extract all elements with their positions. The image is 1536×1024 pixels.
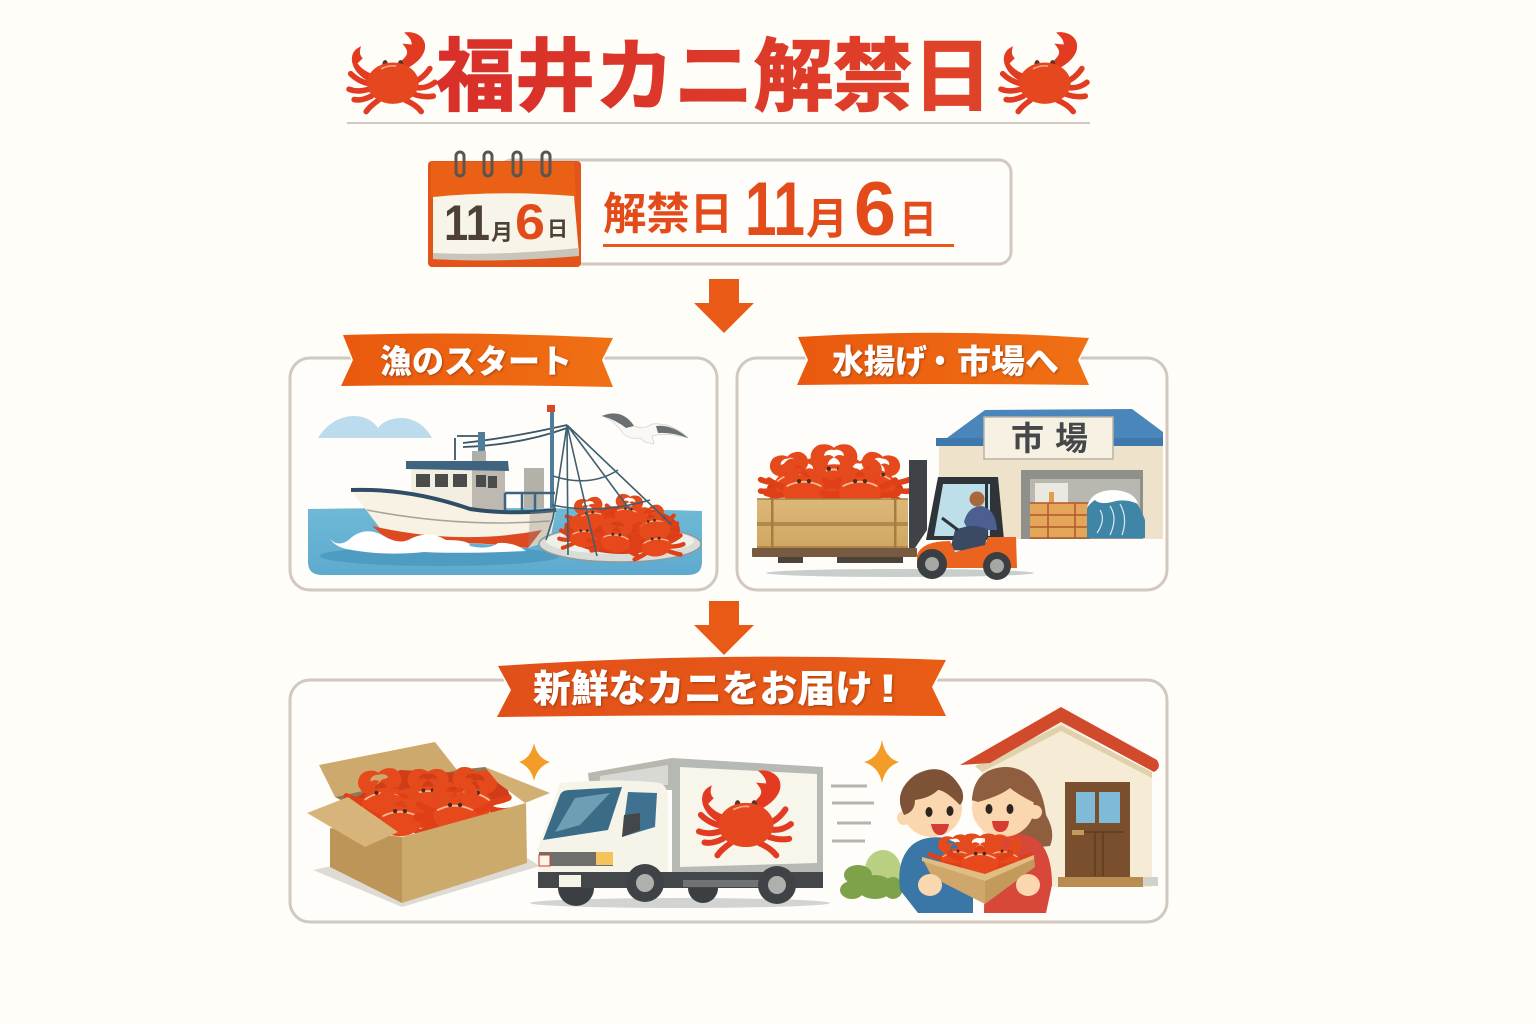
icon: calendar <box>428 152 581 267</box>
banner text <box>832 335 1059 383</box>
icon: calendar: 月 <box>491 215 513 247</box>
banner text: 市場へ <box>957 335 1059 383</box>
market sign: 市 <box>1011 412 1044 460</box>
icon: calendar: 日 <box>547 213 568 243</box>
hands <box>918 874 1040 896</box>
date headline: 解禁日 <box>603 178 733 242</box>
banner text: ・ <box>925 335 955 383</box>
market sign <box>984 412 1113 460</box>
icon: crab right <box>1001 32 1087 112</box>
banner <box>497 657 946 717</box>
banner text: 水揚げ <box>832 335 927 383</box>
date underline <box>603 244 954 247</box>
title block <box>347 12 1090 127</box>
panel frame <box>290 680 1167 922</box>
banner <box>797 333 1089 385</box>
icon: calendar: 6 <box>515 194 545 250</box>
banner text: ! <box>878 667 898 711</box>
illustration: market building <box>936 409 1163 539</box>
icon: crab left <box>349 32 435 112</box>
sea shadow <box>320 546 560 566</box>
arrow 1 <box>694 279 754 333</box>
title rule <box>347 122 1090 124</box>
illustration: seagull <box>602 414 688 444</box>
date headline: 日 <box>899 189 937 245</box>
illustration: fishing boat <box>351 405 567 548</box>
banner <box>341 334 613 387</box>
illustration: sea <box>308 508 702 575</box>
date box frame <box>500 160 1011 264</box>
forklift driver <box>950 492 997 552</box>
banner text: 漁のスタート <box>380 335 572 383</box>
panel frame <box>290 358 717 590</box>
date headline <box>603 167 937 252</box>
panel: delivery <box>290 657 1167 922</box>
illustration: ground shadow <box>766 569 1034 577</box>
date panel <box>428 152 1011 267</box>
illustration: wooden crate <box>752 499 917 563</box>
crabs in crate <box>926 832 1034 877</box>
speed lines <box>831 786 874 841</box>
market crate <box>1030 492 1090 538</box>
date headline: 月 <box>806 185 848 247</box>
illustration: bow waves <box>330 531 526 554</box>
crabs in box <box>341 762 515 837</box>
gift crate <box>922 855 1035 904</box>
market wave <box>1087 490 1145 538</box>
illustration: forklift <box>909 460 1017 580</box>
banner text: 新鮮なカニをお届け <box>533 658 873 713</box>
illustration: bush <box>840 850 903 899</box>
title text: 福井カニ解禁日 <box>436 12 992 127</box>
market sign: 場 <box>1055 412 1088 460</box>
calendar date text: 11 <box>444 195 490 251</box>
icon: sparkle right <box>864 740 899 783</box>
crab on truck <box>699 770 791 855</box>
illustration: crab pile <box>754 444 916 507</box>
panel frame <box>737 358 1167 590</box>
illustration: delivery truck <box>530 758 830 908</box>
date headline: 6 <box>854 167 896 252</box>
girl <box>972 767 1052 913</box>
panel: landing and market <box>737 333 1167 590</box>
illustration: net with crabs <box>539 425 701 562</box>
arrow 2 <box>694 601 754 655</box>
illustration: clouds <box>318 416 432 438</box>
illustration: house <box>960 707 1159 887</box>
icon: sparkle left <box>519 743 550 781</box>
panel: fishing start <box>290 334 717 590</box>
illustration: family <box>897 767 1052 913</box>
illustration: cardboard box <box>307 742 550 907</box>
boy <box>897 769 973 913</box>
date headline: 11 <box>745 167 805 252</box>
